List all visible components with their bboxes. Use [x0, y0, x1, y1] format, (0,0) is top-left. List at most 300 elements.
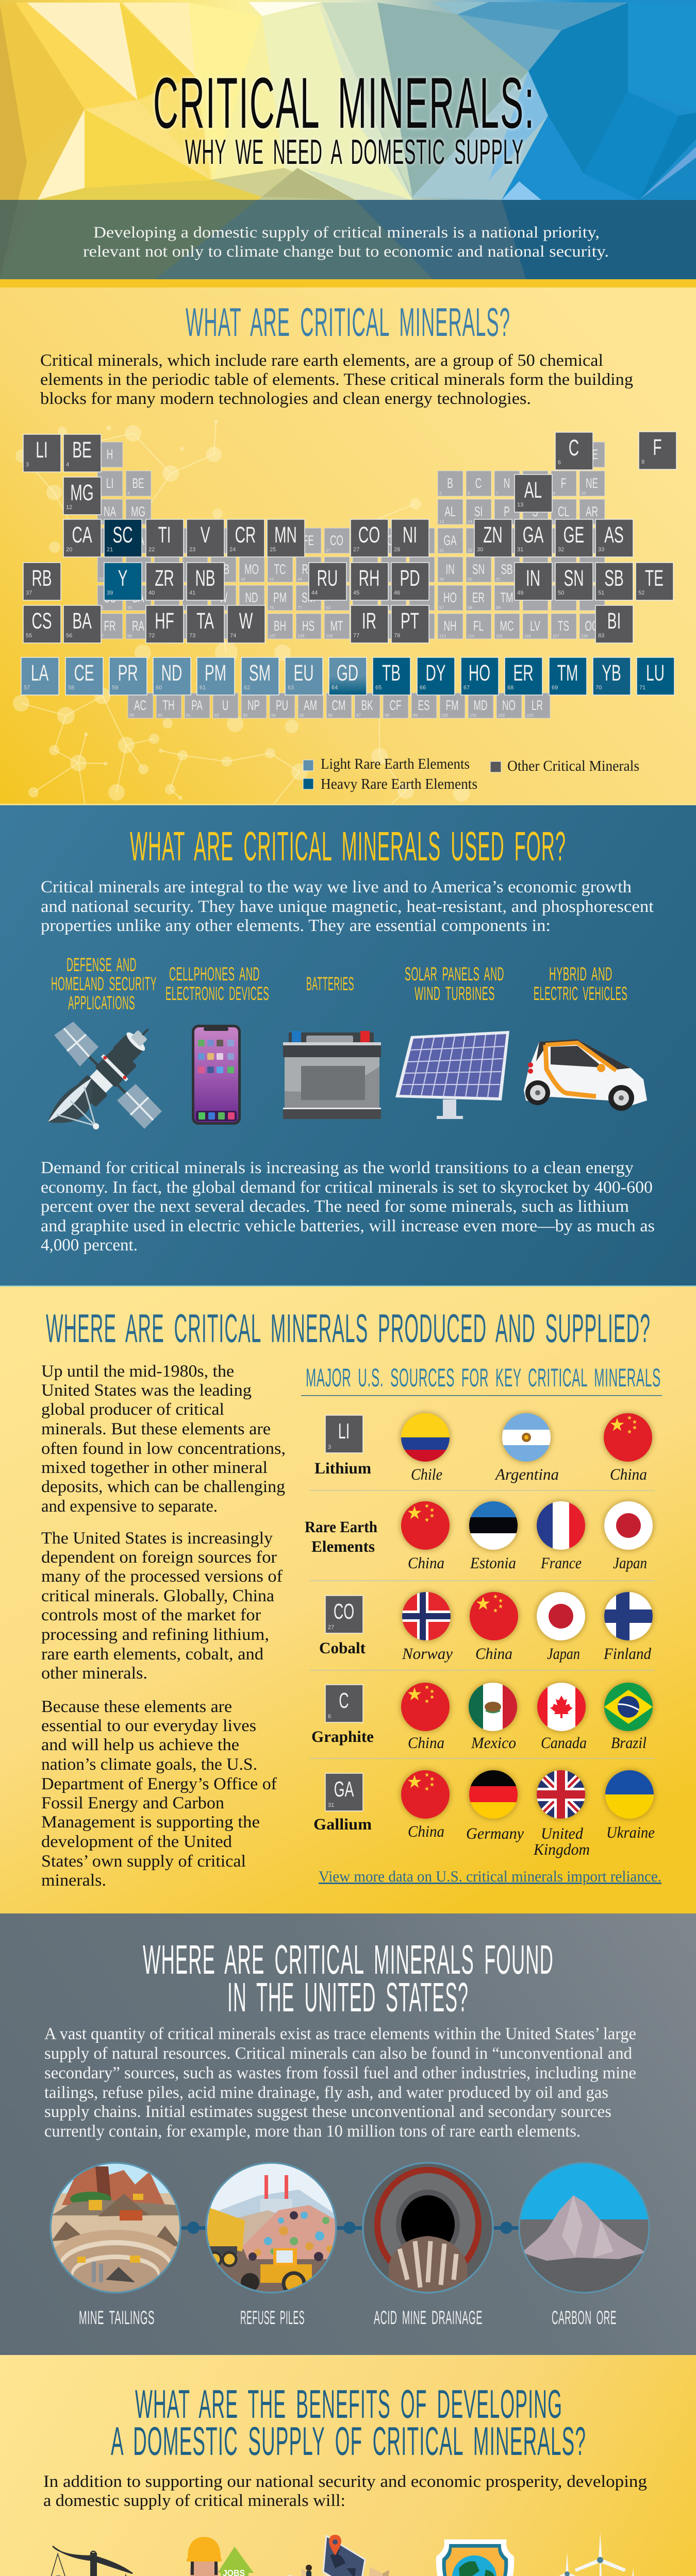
periodic table: EU — [293, 660, 314, 686]
periodic table: 32 — [558, 547, 564, 553]
periodic table: 7 — [496, 491, 499, 496]
periodic table: AC — [134, 698, 146, 713]
body text — [43, 2472, 647, 2510]
periodic table: 45 — [353, 590, 359, 596]
periodic table: SB — [604, 566, 624, 591]
periodic table: NB — [195, 566, 216, 591]
icon: supply chain logistics — [280, 2535, 397, 2576]
periodic table: Y — [118, 566, 127, 591]
image labels: REFUSE PILES — [240, 2307, 305, 2328]
periodic table: 1 — [99, 462, 102, 467]
periodic table: 42 — [241, 577, 245, 582]
left text column: essential to our everyday lives — [41, 1717, 256, 1735]
periodic table: 68 — [507, 685, 513, 691]
periodic table: 118 — [581, 634, 588, 638]
periodic table: AL — [444, 504, 456, 519]
periodic table: B — [447, 476, 453, 491]
periodic table: RB — [31, 566, 52, 591]
row: cobalt: Cobalt — [319, 1639, 366, 1657]
periodic table: TC — [274, 562, 286, 577]
periodic table: CF — [389, 698, 402, 713]
periodic table: W — [239, 608, 253, 634]
periodic table: ER — [472, 590, 485, 605]
periodic table: ZN — [416, 533, 428, 548]
row: cobalt: CO — [334, 1599, 354, 1623]
body text: In addition to supporting our national security and economic prosperity, developing — [43, 2472, 647, 2491]
periodic table: 55 — [99, 605, 104, 610]
periodic table: 58 — [68, 685, 74, 691]
row: gallium: Ukraine — [606, 1823, 655, 1841]
periodic table: 28 — [394, 547, 400, 553]
body text: and national security. They have unique magnetic, heat-resistant, and phosphorescent — [41, 897, 654, 916]
body text: properties unlike any other elements. They are essential components in: — [41, 917, 551, 935]
left text column: Because these elements are — [41, 1698, 232, 1716]
periodic table: BE — [132, 476, 144, 491]
periodic table: 10 — [581, 491, 586, 496]
periodic table: 83 — [598, 633, 604, 639]
periodic table: CU — [387, 533, 400, 548]
periodic table: 27 — [326, 548, 330, 553]
image: mine tailings — [48, 2162, 183, 2294]
periodic table: 56 — [127, 605, 132, 610]
application labels: DEFENSE AND — [67, 954, 137, 975]
periodic table: HF — [155, 608, 174, 634]
periodic table: 49 — [439, 577, 444, 582]
periodic table: LA — [31, 660, 49, 686]
row: cobalt: Finland — [603, 1645, 651, 1663]
row: gallium: GA — [334, 1777, 354, 1801]
panel: where are critical minerals found in the united states — [0, 1913, 696, 2355]
periodic table: PD — [400, 566, 420, 591]
body text: a domestic supply of critical minerals will: — [43, 2492, 345, 2510]
periodic table: 57 — [24, 685, 30, 691]
periodic table: ER — [513, 660, 534, 686]
legend: Other Critical Minerals — [507, 758, 639, 774]
left text column: Up until the mid-1980s, the — [41, 1362, 234, 1381]
periodic table: 13 — [517, 502, 523, 508]
periodic table: 14 — [468, 519, 472, 524]
periodic table: 78 — [394, 633, 400, 639]
periodic table: BK — [361, 698, 373, 713]
periodic table: 2 — [581, 462, 584, 467]
body text: 4,000 percent. — [41, 1236, 138, 1255]
body text: blocks for many modern technologies and clean energy technologies. — [40, 389, 531, 408]
periodic table: GD — [337, 660, 358, 686]
periodic table: MG — [131, 504, 145, 519]
left text column: United States was the leading — [41, 1381, 252, 1400]
periodic table: 60 — [156, 685, 162, 691]
left text column: minerals. But these elements are — [41, 1420, 271, 1438]
periodic table: 52 — [638, 590, 644, 596]
periodic table: 113 — [439, 634, 446, 638]
legend: Light Rare Earth Elements — [321, 756, 470, 772]
intro text block: Developing a domestic supply of critical minerals is a national priority, — [93, 223, 600, 241]
periodic table: 94 — [271, 713, 276, 718]
periodic table: CS — [104, 590, 116, 605]
application labels: BATTERIES — [306, 973, 354, 994]
body text: elements in the periodic table of elements. These critical minerals form the building — [40, 370, 633, 389]
periodic table: NI — [403, 522, 417, 548]
periodic table: LU — [646, 660, 665, 686]
body text: tailings, refuse piles, acid mine drainage, fly ash, and water produced by oil and gas — [44, 2083, 608, 2102]
periodic table: TA — [196, 608, 214, 634]
periodic table: HE — [586, 447, 598, 462]
periodic table: TS — [558, 618, 569, 634]
periodic table: O — [532, 476, 539, 491]
body text: currently contain, for example, more than 10 million tons of rare earth elements. — [44, 2122, 581, 2141]
left text column: rare earth elements, cobalt, and — [41, 1645, 264, 1664]
periodic table: FL — [473, 618, 484, 634]
row: graphite: Brazil — [611, 1734, 647, 1752]
left text column: global producer of critical — [41, 1400, 224, 1419]
left text column: Management is supporting the — [41, 1813, 260, 1832]
periodic table: 51 — [496, 577, 501, 582]
legend: Heavy Rare Earth Elements — [321, 776, 477, 792]
periodic table: ZN — [483, 522, 503, 548]
row: cobalt — [319, 1591, 654, 1663]
periodic table: 44 — [297, 577, 302, 582]
periodic table: 49 — [517, 590, 523, 596]
periodic table: FE — [303, 533, 314, 548]
panel: benefits of a domestic supply — [0, 2355, 696, 2576]
periodic table: 4 — [66, 462, 69, 468]
periodic table: RA — [132, 618, 144, 634]
body text — [41, 878, 654, 935]
periodic table: N — [504, 476, 510, 491]
periodic table: 88 — [127, 634, 132, 638]
periodic table: 31 — [439, 548, 444, 553]
row: rare earth elements — [305, 1500, 654, 1572]
left text column: minerals. — [41, 1871, 106, 1890]
periodic table: 41 — [189, 590, 195, 596]
icon: wind turbines and solar — [547, 2532, 649, 2576]
periodic table: 18 — [581, 519, 586, 524]
periodic table: 93 — [243, 713, 247, 718]
periodic table: 76 — [269, 605, 274, 610]
periodic table: TH — [162, 698, 175, 713]
periodic table: SN — [564, 566, 584, 591]
icon: battery — [283, 1031, 381, 1119]
panel: what are critical minerals — [0, 287, 696, 805]
body text: supply chains. Initial estimates suggest these unconventional and secondary sources — [44, 2103, 611, 2121]
periodic table: LI — [106, 476, 113, 491]
periodic table: IN — [445, 562, 455, 577]
periodic table: 69 — [552, 685, 558, 691]
periodic table: AM — [304, 698, 317, 713]
periodic table: NB — [217, 562, 229, 577]
body text: Demand for critical minerals is increasing as the world transitions to a clean energy — [41, 1159, 634, 1177]
periodic table: H — [107, 447, 113, 462]
periodic table: 25 — [270, 547, 276, 553]
periodic table: PM — [205, 660, 226, 686]
periodic table: 26 — [297, 548, 302, 553]
section heading — [111, 2381, 586, 2464]
row: cobalt: Norway — [402, 1645, 453, 1663]
periodic table: CO — [330, 533, 343, 548]
periodic table: GA — [444, 533, 456, 548]
row: gallium: United — [541, 1824, 583, 1842]
periodic table: 114 — [468, 634, 474, 638]
periodic table: 21 — [107, 547, 113, 553]
icon: solar panel — [395, 1031, 509, 1119]
row: rare earth elements: Elements — [311, 1537, 375, 1555]
row: gallium: Germany — [466, 1824, 524, 1842]
periodic table: BA — [132, 590, 144, 605]
periodic table — [21, 432, 676, 718]
periodic table: 62 — [244, 685, 250, 691]
periodic table: 17 — [553, 519, 557, 524]
icon: electric car — [524, 1039, 647, 1111]
periodic table: CL — [558, 504, 569, 519]
periodic table: 77 — [353, 633, 359, 639]
periodic table: 74 — [212, 605, 217, 610]
periodic table: 70 — [595, 685, 602, 691]
application labels: HYBRID AND — [549, 963, 612, 985]
periodic table: 90 — [158, 713, 162, 718]
periodic table: 95 — [300, 713, 304, 718]
image labels: ACID MINE DRAINAGE — [374, 2307, 483, 2328]
row: gallium — [313, 1769, 655, 1858]
application labels: SOLAR PANELS AND — [405, 963, 504, 985]
periodic table: MO — [244, 562, 259, 577]
left text column: other minerals. — [41, 1664, 147, 1683]
body text — [41, 1159, 655, 1255]
periodic table: 100 — [441, 713, 449, 718]
periodic table: CO — [358, 522, 380, 548]
periodic table: 89 — [129, 713, 134, 718]
periodic table: BH — [274, 618, 286, 634]
body text: A vast quantity of critical minerals exist as trace elements within the United States’ large — [44, 2025, 636, 2043]
periodic table: MC — [500, 618, 513, 634]
periodic table: 71 — [639, 685, 645, 691]
periodic table: NP — [247, 698, 260, 713]
icon: balance scale — [47, 2546, 136, 2576]
periodic table: MD — [474, 698, 487, 713]
periodic table: 115 — [496, 634, 503, 638]
periodic table: PA — [191, 698, 203, 713]
periodic table: 43 — [269, 577, 274, 582]
row: cobalt: China — [475, 1645, 512, 1663]
row: lithium: Chile — [411, 1465, 442, 1483]
periodic table: F — [561, 476, 566, 491]
body text: Critical minerals are integral to the way we live and to America’s economic growth — [41, 878, 632, 896]
body text: percent over the next several decades. The need for some minerals, such as lithium — [41, 1197, 629, 1216]
periodic table: 77 — [297, 605, 302, 610]
row: graphite: Canada — [541, 1734, 587, 1752]
periodic table: 91 — [186, 713, 191, 718]
periodic table: 12 — [127, 519, 132, 524]
periodic table: 13 — [439, 519, 444, 524]
row: graphite: Graphite — [311, 1727, 374, 1745]
left text column: Department of Energy’s Office of — [41, 1775, 277, 1793]
periodic table: 64 — [332, 685, 338, 691]
left text column: often found in low concentrations, — [41, 1439, 286, 1458]
row: gallium: China — [408, 1822, 444, 1840]
row: rare earth elements: France — [540, 1554, 582, 1572]
periodic table: CE — [74, 660, 94, 686]
row: lithium: Argentina — [494, 1465, 559, 1483]
image: carbon ore — [519, 2162, 650, 2294]
periodic table: ZR — [155, 566, 174, 591]
icon: cellphone — [192, 1025, 241, 1125]
row: cobalt: Japan — [547, 1645, 580, 1663]
periodic table: SM — [302, 590, 315, 605]
periodic table: MT — [330, 618, 343, 634]
periodic table: 20 — [66, 547, 72, 553]
intro text block — [83, 223, 609, 260]
periodic table: 103 — [526, 713, 534, 718]
periodic table: 40 — [148, 590, 155, 596]
periodic table: SB — [501, 562, 513, 577]
title — [153, 62, 535, 172]
periodic table: MG — [70, 480, 94, 505]
periodic table: 66 — [420, 685, 426, 691]
periodic table: DY — [425, 660, 446, 686]
periodic table: 37 — [99, 577, 104, 582]
periodic table: 97 — [356, 713, 361, 718]
application labels: APPLICATIONS — [68, 992, 135, 1013]
periodic table: NE — [586, 476, 598, 491]
intro text block: relevant not only to climate change but to economic and national security. — [83, 242, 609, 260]
periodic table: 67 — [439, 605, 444, 610]
application labels: WIND TURBINES — [415, 983, 495, 1004]
periodic table: 108 — [297, 634, 305, 638]
periodic table: 5 — [439, 491, 442, 496]
periodic table: 61 — [200, 685, 206, 691]
periodic table: W — [219, 590, 228, 605]
periodic table: CM — [332, 698, 345, 713]
periodic table: 3 — [99, 491, 102, 496]
periodic table: AL — [524, 478, 542, 503]
periodic table: 63 — [326, 605, 330, 610]
periodic table: TM — [501, 590, 513, 605]
icon: shield with globe — [436, 2539, 514, 2576]
periodic table: TM — [557, 660, 578, 686]
periodic table: U — [222, 698, 228, 713]
periodic table: HO — [469, 660, 490, 686]
row: lithium: China — [610, 1465, 647, 1483]
periodic table: PR — [118, 660, 138, 686]
periodic table: 72 — [148, 633, 155, 639]
periodic table: AS — [604, 522, 624, 548]
periodic table: 68 — [468, 605, 472, 610]
row: gallium: Kingdom — [533, 1840, 590, 1858]
periodic table: C — [569, 435, 579, 461]
periodic table: TI — [158, 522, 171, 548]
image labels — [79, 2307, 617, 2328]
left text column: nation’s climate goals, the U.S. — [41, 1755, 257, 1774]
row: rare earth elements: Japan — [613, 1554, 647, 1572]
periodic table: 69 — [496, 605, 501, 610]
periodic table: 4 — [127, 491, 130, 496]
periodic table: LI — [36, 437, 48, 463]
periodic table: NO — [502, 698, 516, 713]
periodic table: SN — [472, 562, 485, 577]
periodic table: P — [504, 504, 510, 519]
periodic table: 31 — [517, 547, 523, 553]
section heading — [143, 1937, 554, 2020]
row: graphite: Mexico — [471, 1734, 516, 1752]
application labels: CELLPHONES AND — [169, 963, 260, 985]
periodic table: IR — [362, 608, 376, 634]
panel: hero header — [0, 0, 696, 287]
periodic table: 6 — [468, 491, 470, 496]
left text column: deposits, which can be challenging — [41, 1478, 285, 1496]
periodic table: OG — [585, 618, 599, 634]
periodic table: 87 — [99, 634, 104, 638]
row: lithium: LI — [338, 1419, 350, 1443]
icon: satellite — [42, 1021, 162, 1150]
periodic table: PU — [276, 698, 288, 713]
periodic table: 39 — [107, 590, 113, 596]
periodic table: F — [653, 435, 662, 460]
periodic table: 32 — [468, 548, 472, 553]
periodic table: 56 — [66, 633, 72, 639]
left text column: Fossil Energy and Carbon — [41, 1794, 224, 1812]
periodic table: IN — [526, 566, 540, 591]
panel: where are critical minerals found in the united states: CARBON ORE — [552, 2307, 617, 2328]
image: refuse piles — [206, 2162, 337, 2294]
row: graphite: China — [408, 1734, 444, 1752]
periodic table: 24 — [229, 547, 236, 553]
periodic table: 27 — [353, 547, 359, 553]
periodic table: HS — [302, 618, 314, 634]
left text column: controls most of the market for — [41, 1606, 261, 1624]
row: rare earth elements: Rare Earth — [305, 1518, 377, 1536]
periodic table: YB — [602, 660, 621, 686]
body text — [44, 2025, 636, 2141]
image labels: MINE TAILINGS — [79, 2307, 155, 2328]
image: acid mine drainage — [363, 2162, 494, 2293]
periodic table: ND — [245, 590, 258, 605]
periodic table: HO — [443, 590, 457, 605]
periodic table: 55 — [26, 633, 32, 639]
periodic table: 67 — [463, 685, 470, 691]
left text column: processing and refining lithium, — [41, 1625, 269, 1644]
body text: and graphite used in electric vehicle batteries, will increase even more—by as much as — [41, 1217, 655, 1235]
periodic table: 3 — [26, 462, 29, 468]
application labels — [51, 954, 627, 1013]
periodic table: RU — [302, 562, 314, 577]
periodic table: GA — [523, 522, 544, 548]
periodic table: SM — [249, 660, 271, 686]
periodic table: 50 — [558, 590, 564, 596]
row: graphite: 6 — [328, 1714, 331, 1720]
periodic table: 30 — [477, 547, 483, 553]
periodic table: SI — [474, 504, 483, 519]
row: rare earth elements: China — [408, 1554, 444, 1572]
row: gallium: Gallium — [313, 1815, 372, 1833]
periodic table: FM — [446, 698, 458, 713]
periodic table: 8 — [524, 491, 527, 496]
periodic table: PT — [401, 608, 419, 634]
periodic table: 99 — [413, 713, 418, 718]
left text column: critical minerals. Globally, China — [41, 1587, 274, 1605]
panel: what are critical minerals used for — [0, 804, 696, 1286]
periodic table: CA — [132, 533, 144, 548]
periodic table: 37 — [26, 590, 32, 596]
row: lithium: 3 — [328, 1444, 331, 1450]
body text — [40, 351, 633, 408]
row: rare earth elements: Estonia — [470, 1554, 516, 1572]
left text column: The United States is increasingly — [41, 1529, 273, 1548]
periodic table: 12 — [66, 504, 72, 511]
link: View more data on U.S. critical minerals import reliance. — [319, 1868, 661, 1885]
periodic table: BI — [607, 608, 621, 634]
periodic table: 63 — [288, 685, 294, 691]
application labels: ELECTRONIC DEVICES — [165, 983, 269, 1004]
periodic table: 96 — [328, 713, 333, 718]
